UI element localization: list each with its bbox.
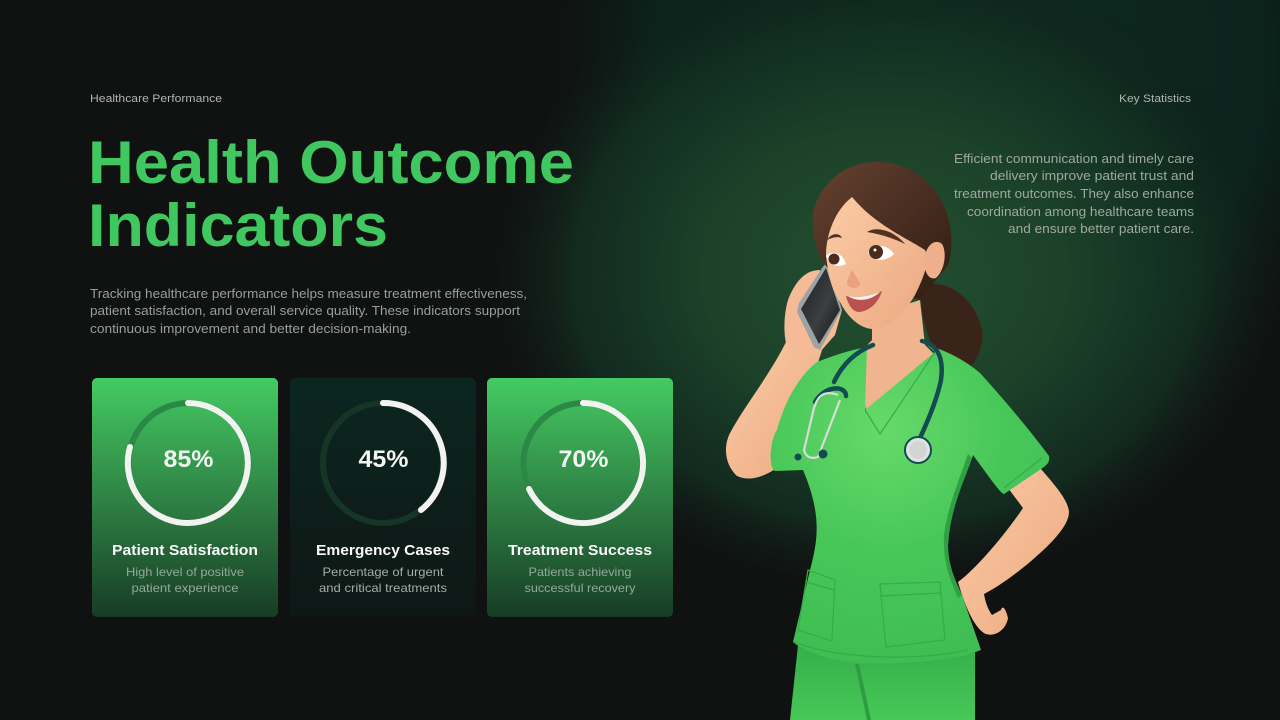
neck [858, 300, 935, 412]
right text block [954, 151, 1195, 236]
card description: and critical treatments [319, 581, 447, 595]
value 45%: 45% [358, 446, 408, 473]
pants [790, 645, 975, 720]
value 85%: 85% [164, 446, 214, 473]
hand [784, 270, 842, 356]
right text block: coordination among healthcare teams [967, 204, 1195, 219]
card description: patient experience [132, 581, 239, 595]
intro text block: patient satisfaction, and overall service quality. These indicators support [90, 303, 520, 318]
left arm [726, 340, 822, 479]
right arm [958, 462, 1069, 635]
card heading: Patient Satisfaction [112, 542, 258, 559]
ear [924, 242, 945, 278]
right text block: delivery improve patient trust and [990, 168, 1194, 183]
title [88, 129, 574, 259]
face [826, 197, 927, 329]
stethoscope chest piece [905, 437, 931, 463]
eyebrow: Key Statistics: Key Statistics [1119, 93, 1192, 105]
card heading: Emergency Cases [316, 542, 450, 559]
panel: emergency cases [290, 378, 476, 617]
progress ring 70% [524, 403, 644, 523]
card description [319, 565, 447, 595]
right text block: Efficient communication and timely care [954, 151, 1194, 166]
card description: Percentage of urgent [322, 565, 444, 579]
phone [797, 262, 842, 350]
right text block: treatment outcomes. They also enhance [954, 186, 1194, 201]
progress ring 45% [323, 403, 444, 523]
stethoscope tube [815, 341, 942, 438]
right text block: and ensure better patient care. [1008, 221, 1194, 236]
eyebrow: Healthcare Performance: Healthcare Performance [90, 93, 222, 105]
panel: treatment success [487, 378, 673, 617]
illustration: nurse on phone [726, 162, 1069, 720]
value 70%: 70% [558, 446, 608, 473]
card description: High level of positive [126, 565, 244, 579]
shirt [771, 345, 1049, 663]
ponytail [921, 284, 982, 368]
title: Indicators [88, 192, 388, 259]
mouth [846, 291, 882, 312]
eyebrows [827, 229, 905, 244]
card description: successful recovery [524, 581, 636, 595]
card description [524, 565, 636, 595]
pants crease [855, 664, 871, 720]
progress ring 85% [128, 403, 248, 523]
intro text block: Tracking healthcare performance helps measure treatment effectiveness, [90, 286, 527, 301]
eyes [826, 245, 894, 266]
card description [126, 565, 244, 595]
intro text block [90, 286, 527, 336]
stethoscope binaurals [804, 393, 840, 458]
side shadow [944, 454, 972, 598]
title: Health Outcome [88, 129, 574, 196]
card heading: Treatment Success [508, 542, 652, 559]
intro text block: continuous improvement and better decision-making. [90, 321, 411, 336]
pockets and seams [793, 352, 1042, 657]
hair back [813, 162, 951, 300]
nose [847, 270, 860, 288]
card description: Patients achieving [528, 565, 632, 579]
stethoscope ear tips [794, 450, 828, 460]
panel: patient satisfaction [92, 378, 278, 617]
